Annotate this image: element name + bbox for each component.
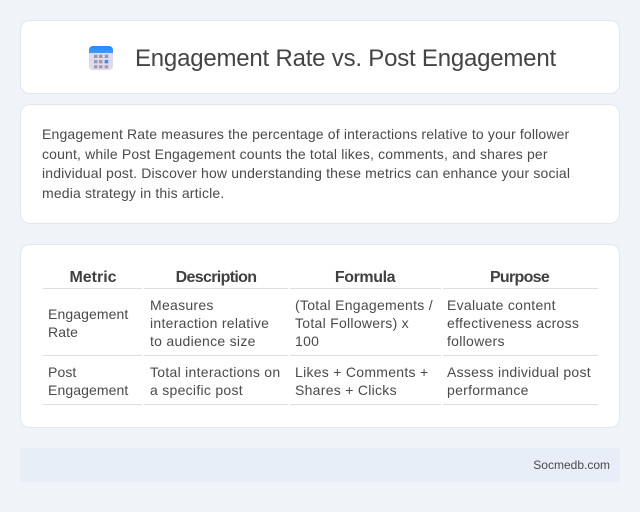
table row: Engagement Rate — [48, 297, 579, 349]
footer: source: Socmedb.com — [533, 458, 610, 472]
table row: Engagement Rate: Total Followers) x — [295, 315, 409, 331]
table row: Post Engagement: Post — [48, 364, 76, 380]
table header: Metric — [69, 269, 117, 286]
table row: Engagement Rate: 100 — [295, 333, 319, 349]
table row: Engagement Rate: Measures — [150, 297, 214, 313]
table header: Purpose — [490, 269, 549, 286]
text block: intro: individual post. Discover how understanding these metrics can enhance your social — [42, 165, 570, 181]
table row: Post Engagement — [48, 364, 591, 398]
table row: Engagement Rate: interaction relative — [150, 315, 269, 331]
table row: Engagement Rate: followers — [447, 333, 505, 349]
text block: intro: Engagement Rate measures the percentage of interactions relative to your follower — [42, 126, 569, 142]
title: Engagement Rate vs. Post Engagement — [135, 45, 556, 72]
table row: Post Engagement: Likes + Comments + — [295, 364, 428, 380]
table row: Post Engagement: Shares + Clicks — [295, 382, 397, 398]
table row: Engagement Rate: Evaluate content — [447, 297, 556, 313]
table row: Post Engagement: performance — [447, 382, 529, 398]
table row: Post Engagement: Engagement — [48, 382, 128, 398]
table row: Engagement Rate: to audience size — [150, 333, 256, 349]
table header: Description — [176, 269, 256, 286]
table header: Formula — [335, 269, 395, 286]
panel: intro text — [20, 104, 620, 224]
table row: Engagement Rate: Engagement — [48, 306, 128, 322]
table header — [69, 269, 550, 286]
text block: intro — [42, 126, 570, 201]
table row: Engagement Rate: Rate — [48, 324, 78, 340]
table row: Post Engagement: Assess individual post — [447, 364, 591, 380]
table row: Post Engagement: Total interactions on — [150, 364, 280, 380]
panel: title card — [20, 20, 620, 94]
table row: Engagement Rate: (Total Engagements / — [295, 297, 433, 313]
icon: calendar — [89, 46, 113, 70]
footer bar — [20, 448, 620, 482]
text block: intro: count, while Post Engagement counts the total likes, comments, and shares per — [42, 146, 548, 162]
panel: comparison table — [20, 244, 620, 428]
table row: Post Engagement: a specific post — [150, 382, 243, 398]
table row: Engagement Rate: effectiveness across — [447, 315, 579, 331]
text block: intro: media strategy in this article. — [42, 184, 224, 200]
